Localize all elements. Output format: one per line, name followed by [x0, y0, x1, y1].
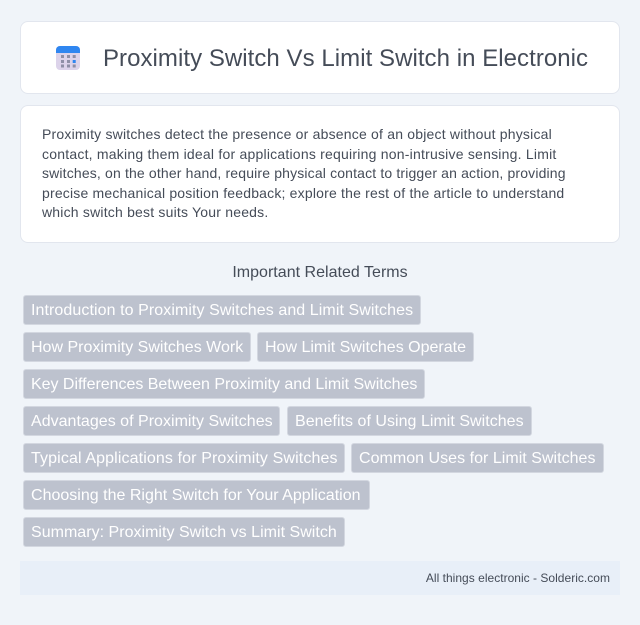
footer credit: All things electronic - Solderic.com	[426, 571, 610, 585]
tag	[23, 332, 251, 362]
tag: Advantages of Proximity Switches	[31, 413, 273, 430]
intro paragraph: precise mechanical position feedback; explore the rest of the article to understand	[42, 184, 564, 200]
tag: Common Uses for Limit Switches	[359, 450, 596, 467]
tag: Key Differences Between Proximity and Limit Switches	[31, 376, 417, 393]
intro text panel	[20, 105, 620, 243]
section heading: Important Related Terms	[232, 264, 408, 281]
icon: calendar	[56, 46, 80, 70]
tag	[23, 295, 421, 325]
tag	[287, 406, 532, 436]
tag: How Limit Switches Operate	[265, 339, 466, 356]
intro paragraph: contact, making them ideal for applications requiring non-intrusive sensing. Limit	[42, 146, 557, 162]
intro paragraph	[42, 126, 566, 220]
tag	[23, 406, 280, 436]
tag	[23, 517, 345, 547]
tag: Summary: Proximity Switch vs Limit Switch	[31, 524, 337, 541]
tag: Choosing the Right Switch for Your Application	[31, 487, 361, 504]
tag: Typical Applications for Proximity Switches	[31, 450, 338, 467]
related terms tags	[23, 295, 604, 547]
tag	[23, 443, 345, 473]
intro paragraph: switches, on the other hand, require physical contact to trigger an action, providing	[42, 165, 566, 181]
tag	[23, 480, 370, 510]
tag: Introduction to Proximity Switches and Limit Switches	[31, 302, 413, 319]
footer bar	[20, 561, 620, 595]
title: Proximity Switch Vs Limit Switch in Electronic	[103, 45, 588, 72]
tag: Benefits of Using Limit Switches	[295, 413, 524, 430]
tag: How Proximity Switches Work	[31, 339, 243, 356]
tag	[351, 443, 604, 473]
intro paragraph: which switch best suits Your needs.	[42, 204, 268, 220]
intro paragraph: Proximity switches detect the presence or absence of an object without physical	[42, 126, 552, 142]
header card	[20, 21, 620, 94]
tag	[23, 369, 425, 399]
tag	[257, 332, 474, 362]
